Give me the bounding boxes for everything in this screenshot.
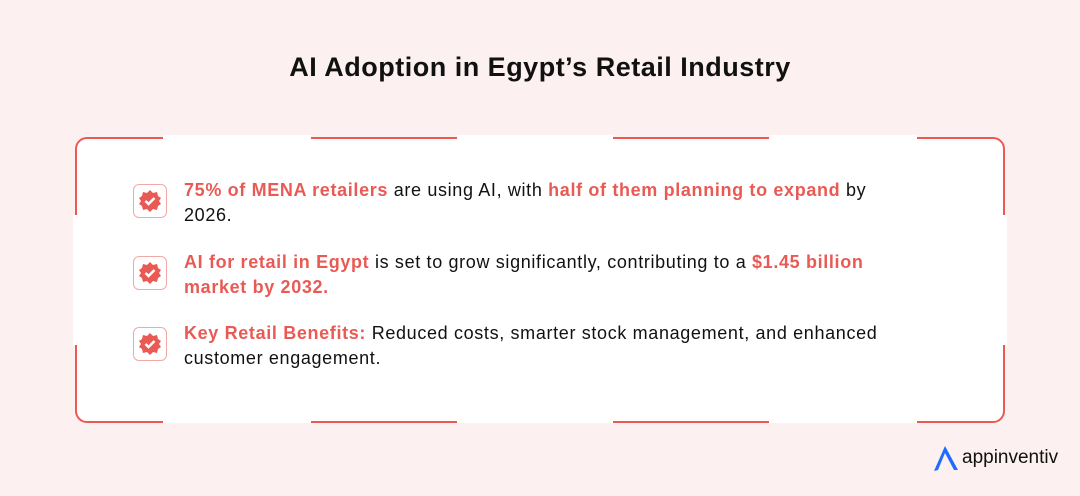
text: item 1: 2026.	[184, 205, 232, 225]
text: item 2: market by 2032.	[184, 277, 329, 297]
panel: card	[75, 137, 1005, 423]
icon: badge 3	[133, 327, 167, 361]
text: item 1: 75% of MENA retailers are using AI, with half of them planning to expand by	[184, 180, 866, 200]
text: item 2	[184, 252, 864, 297]
text: item 3	[184, 323, 877, 368]
logo	[934, 446, 1058, 471]
title: AI Adoption in Egypt’s Retail Industry	[289, 52, 791, 82]
icon: badge 1	[133, 184, 167, 218]
logo: appinventiv	[962, 447, 1058, 468]
text: item 3: customer engagement.	[184, 348, 381, 368]
icon: badge 2	[133, 256, 167, 290]
text: item 2: AI for retail in Egypt is set to grow significantly, contributing to a $1.45 billion	[184, 252, 864, 272]
text: item 1	[184, 180, 866, 225]
text: item 3: Key Retail Benefits: Reduced costs, smarter stock management, and enhanced	[184, 323, 877, 343]
